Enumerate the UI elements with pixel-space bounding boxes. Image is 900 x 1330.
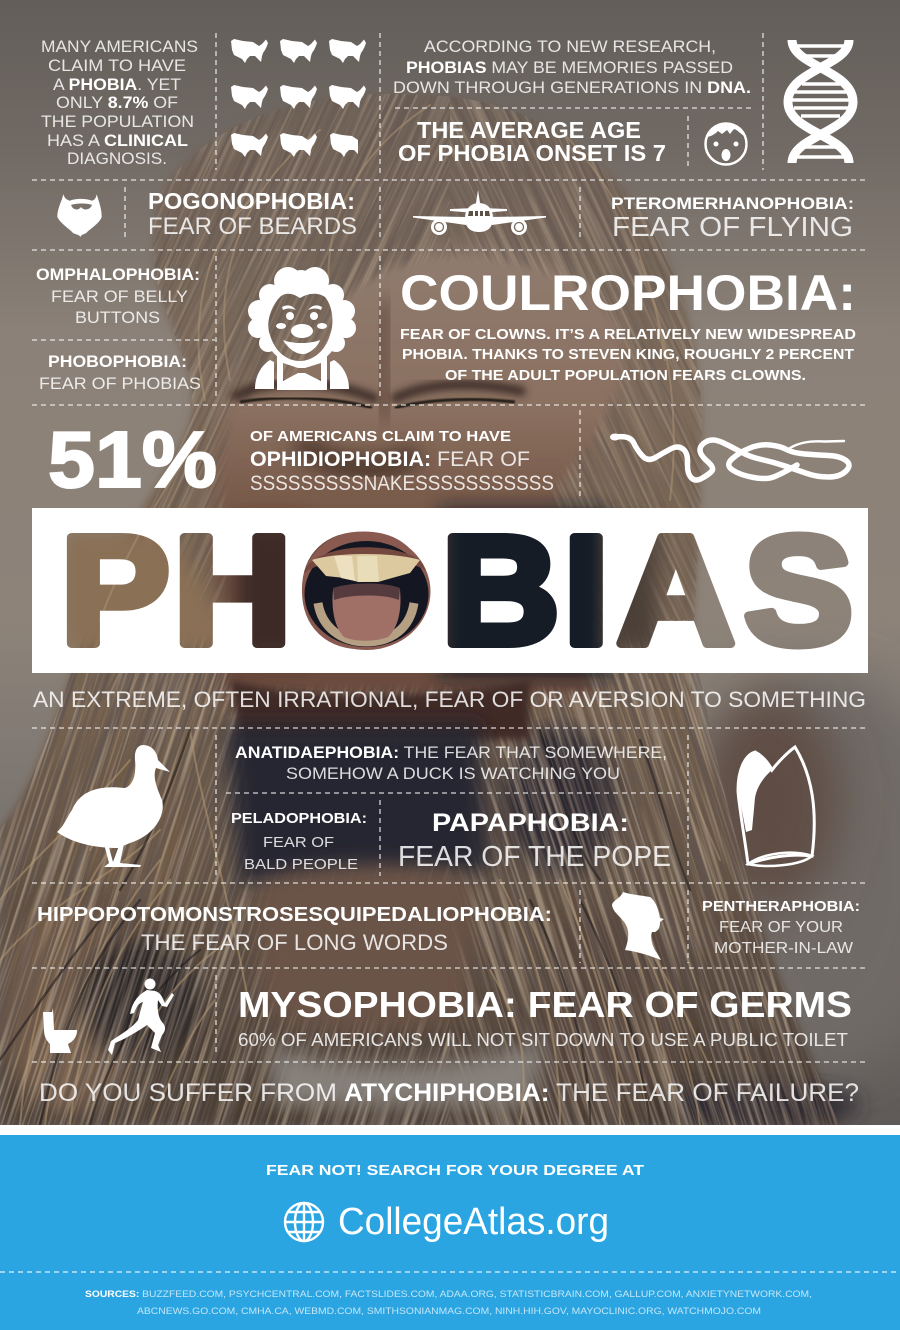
text: papaphobia [398,809,671,873]
text: atychiphobia: DO YOU SUFFER FROM ATYCHIPHOBIA: THE FEAR OF FAILURE? [39,1079,859,1107]
text: anatidaephobia: ANATIDAEPHOBIA: THE FEAR THAT SOMEWHERE, [235,743,667,762]
icon: DNA helix [788,40,853,163]
text: peladophobia: BALD PEOPLE [244,856,358,873]
logo: CollegeAtlas.org: CollegeAtlas.org [338,1201,609,1243]
dashed dividers [32,33,868,1062]
icon: nine US maps [231,39,367,157]
text: pentheraphobia: FEAR OF YOUR [719,919,843,936]
icon: beard [57,194,102,237]
text: hippopotomonstrosesquipedaliophobia: HIPPOPOTOMONSTROSESQUIPEDALIOPHOBIA: [37,904,552,926]
text: ophidiophobia: SSSSSSSSSNAKESSSSSSSSSSS [250,472,554,495]
icon: pope mitre [738,747,814,866]
text: american claim [41,37,198,168]
title: PHOBIAS cut-out panel [32,508,868,673]
text: american claim: A PHOBIA. YET [53,75,181,94]
text: peladophobia [231,810,367,873]
call to action: FEAR NOT! SEARCH FOR YOUR DEGREE AT [266,1162,644,1179]
icon: scared child face [706,123,746,164]
text: anatidaephobia: SOMEHOW A DUCK IS WATCHING YOU [286,764,620,783]
text: phobophobia [39,352,201,393]
text: pentheraphobia [702,898,860,957]
text: average age of onset: OF PHOBIA ONSET IS 7 [398,140,666,166]
subtitle: definition: AN EXTREME, OFTEN IRRATIONAL, FEAR OF OR AVERSION TO SOMETHING [33,687,866,712]
text: coulrophobia [400,265,856,384]
text: omphalophobia: BUTTONS [75,308,160,327]
text: mysophobia [238,984,852,1050]
text: omphalophobia: FEAR OF BELLY [51,287,188,306]
text: phobophobia: FEAR OF PHOBIAS [39,374,201,393]
text: pteromerhanophobia: FEAR OF FLYING [612,211,853,242]
text: pogonophobia [148,188,357,240]
statistic: 51 percent: 51% [48,415,217,504]
text: peladophobia: PELADOPHOBIA: [231,810,367,827]
text: american claim: CLAIM TO HAVE [48,56,186,75]
text: coulrophobia: FEAR OF CLOWNS. IT’S A RELATIVELY NEW WIDESPREAD [400,326,856,343]
text: papaphobia: FEAR OF THE POPE [398,841,671,873]
text: papaphobia: PAPAPHOBIA: [432,809,629,837]
icon: snake [610,434,849,480]
mouth [300,530,434,652]
sources: SOURCES: BUZZFEED.COM, PSYCHCENTRAL.COM, FACTSLIDES.COM, ADAA.ORG, STATISTICBRAIN.COM, GALLUP.COM, ANXIETYNETWORK.COM, [85,1289,812,1300]
text: DNA research: DOWN THROUGH GENERATIONS IN DNA. [393,78,751,97]
text: pentheraphobia: PENTHERAPHOBIA: [702,898,860,915]
text: american claim: ONLY 8.7% OF [56,93,178,112]
text: phobophobia: PHOBOPHOBIA: [48,352,187,371]
text: DNA research: PHOBIAS MAY BE MEMORIES PASSED [406,58,733,77]
icon: duck [57,745,170,867]
text: pogonophobia: FEAR OF BEARDS [148,213,357,240]
text: coulrophobia: OF THE ADULT POPULATION FEARS CLOWNS. [445,367,806,384]
icon: mother-in-law silhouette [612,892,664,960]
text: pteromerhanophobia: PTEROMERHANOPHOBIA: [611,194,854,213]
text: coulrophobia: COULROPHOBIA: [400,265,856,321]
text: peladophobia: FEAR OF [263,834,334,851]
text: coulrophobia: PHOBIA. THANKS TO STEVEN KING, ROUGHLY 2 PERCENT [402,346,854,363]
text: anatidaephobia [235,743,667,783]
icon: running man [108,978,174,1055]
sources: ABCNEWS.GO.COM, CMHA.CA, WEBMD.COM, SMITHSONIANMAG.COM, NINH.HIH.GOV, MAYOCLINIC.ORG, WATCHMOJO.COM [137,1306,761,1317]
icon: globe [285,1203,323,1241]
text: ophidiophobia [250,428,554,495]
text: omphalophobia: OMPHALOPHOBIA: [36,265,200,284]
text: ophidiophobia: OPHIDIOPHOBIA: FEAR OF [250,448,530,471]
text: hippopotomonstrosesquipedaliophobia [37,904,552,955]
panel: blue footer [0,1135,900,1330]
text: average age of onset [398,117,666,166]
text: DNA research: ACCORDING TO NEW RESEARCH, [424,37,716,56]
text: american claim: DIAGNOSIS. [67,149,167,168]
text: mysophobia: MYSOPHOBIA: FEAR OF GERMS [238,984,852,1025]
text: average age of onset: THE AVERAGE AGE [417,117,641,143]
text: pogonophobia: POGONOPHOBIA: [148,188,355,214]
text: american claim: HAS A CLINICAL [47,131,188,150]
icon: airplane [413,190,546,235]
icon: toilet [43,1008,77,1053]
text: omphalophobia [36,265,200,327]
text: pteromerhanophobia [611,194,854,242]
text: DNA research [393,37,751,97]
text: hippopotomonstrosesquipedaliophobia: THE FEAR OF LONG WORDS [141,930,448,955]
text: american claim: THE POPULATION [41,112,194,131]
text: ophidiophobia: OF AMERICANS CLAIM TO HAVE [250,428,511,445]
icon: clown [248,267,356,390]
text: mysophobia: 60% OF AMERICANS WILL NOT SIT DOWN TO USE A PUBLIC TOILET [238,1030,848,1050]
text: american claim: MANY AMERICANS [41,37,198,56]
sources [85,1289,812,1317]
band below photo [0,1125,900,1135]
text: pentheraphobia: MOTHER-IN-LAW [714,940,854,957]
